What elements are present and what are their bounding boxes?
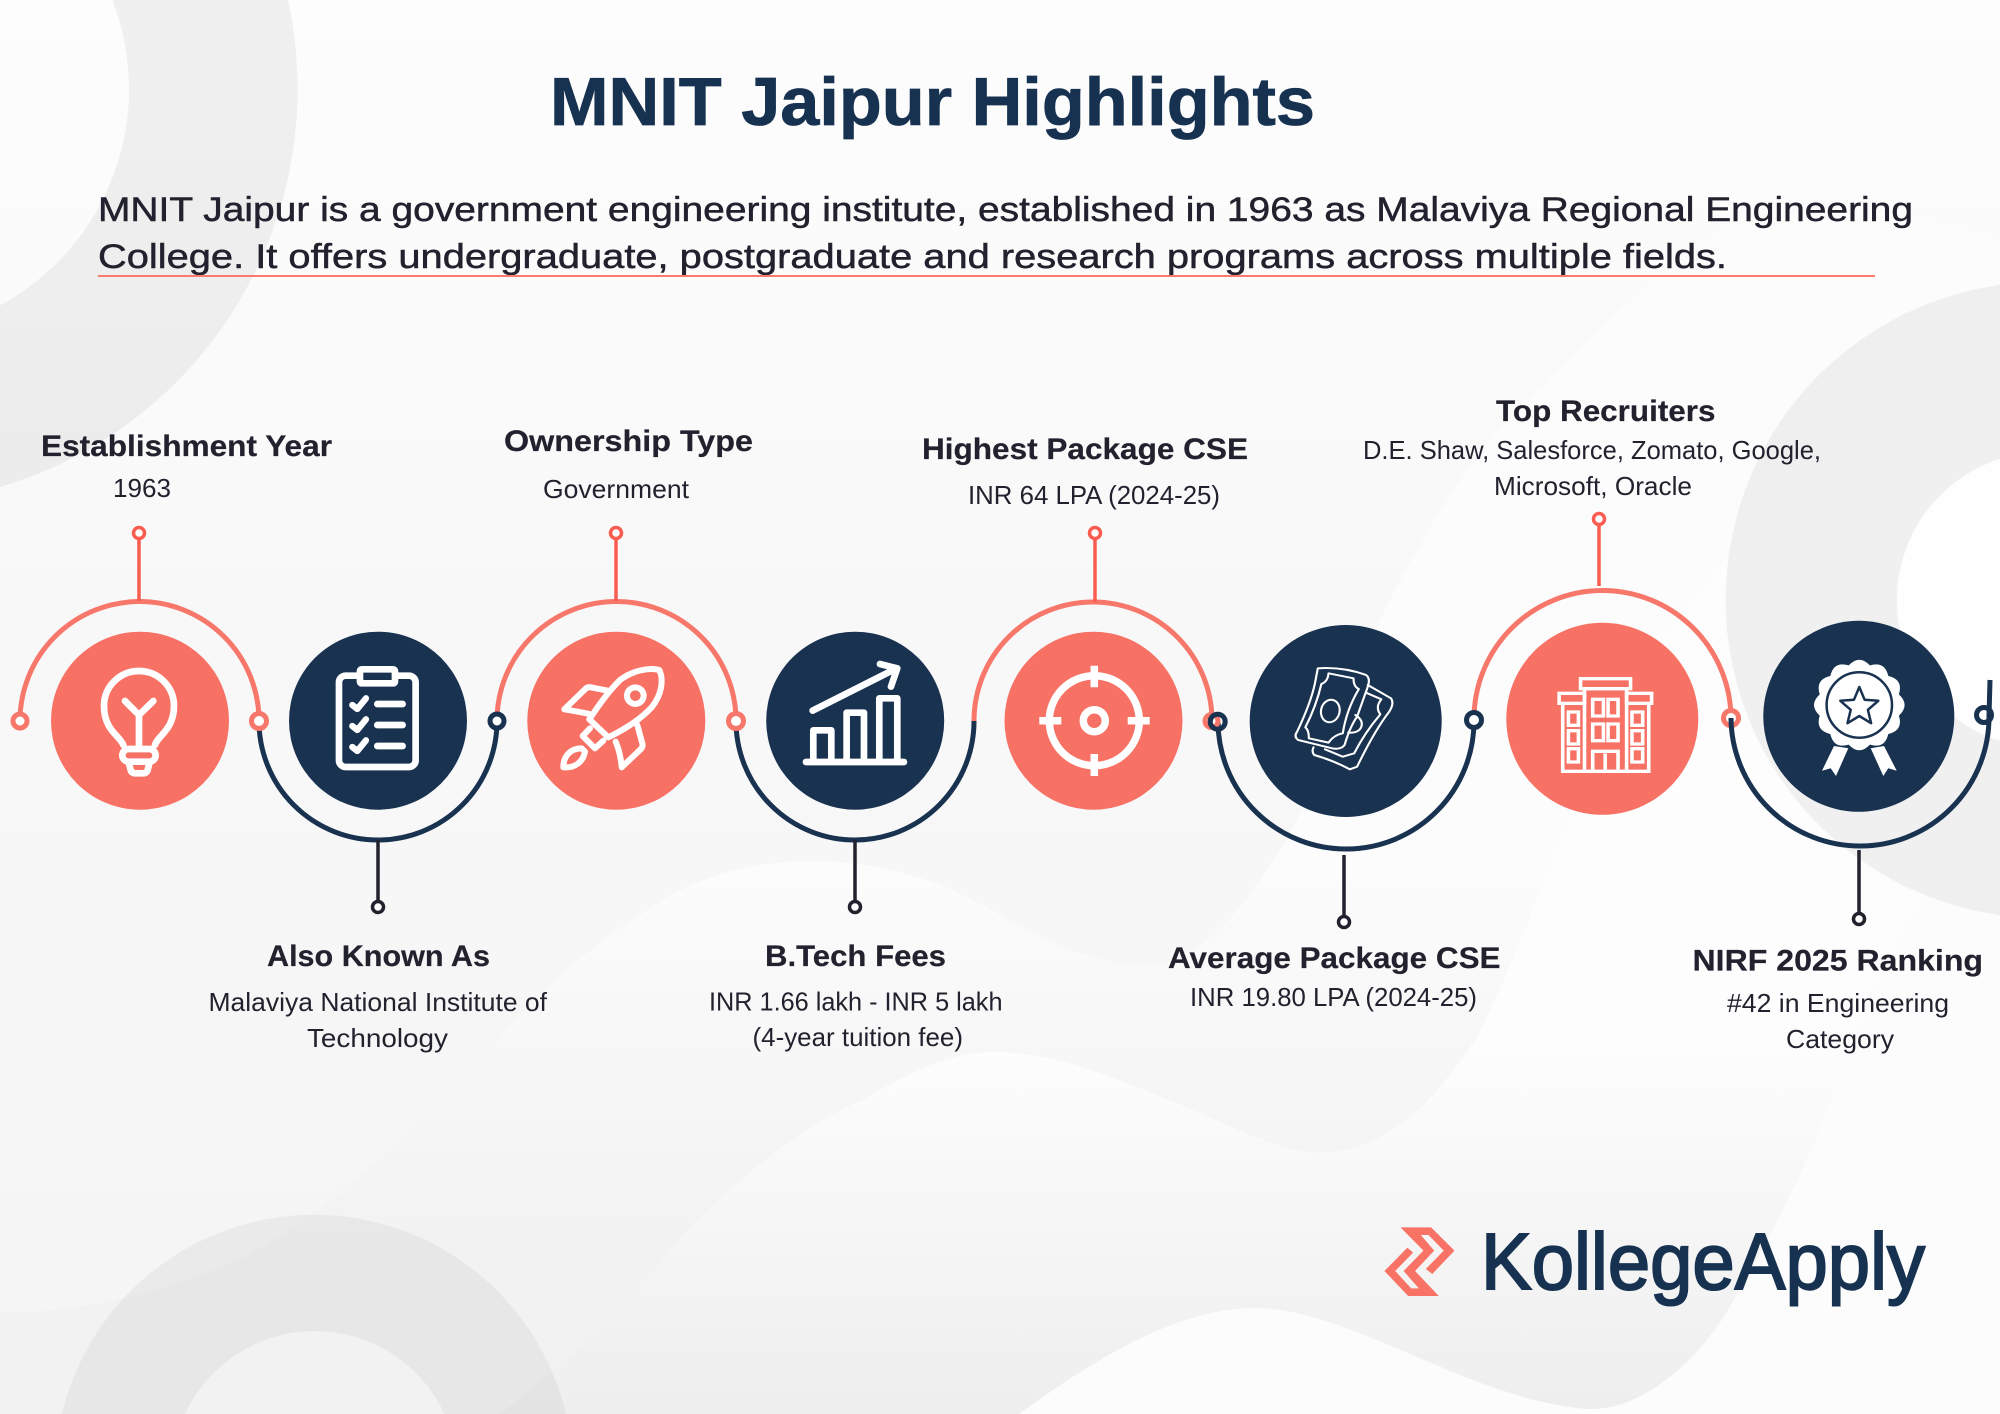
- step 2: also known as: [208, 632, 548, 1053]
- intro paragraph: College. It offers undergraduate, postgraduate and research programs across multiple fields.: [98, 238, 1727, 276]
- icon: award rosette: [1814, 660, 1905, 776]
- heading: Average Package CSE: [1168, 942, 1500, 975]
- heading: Also Known As: [267, 940, 490, 973]
- circle: chart: [766, 632, 944, 810]
- timeline arcs and connectors: [13, 514, 1992, 928]
- circle: target: [1004, 632, 1182, 810]
- value: [208, 987, 548, 1053]
- circle: lightbulb: [51, 632, 229, 810]
- icon: rocket: [563, 669, 662, 767]
- step 8: nirf ranking: [1692, 621, 1983, 1054]
- icon: bar chart: [806, 664, 904, 762]
- logo: KollegeApply: [1384, 1217, 1925, 1306]
- step 4: btech fees: [709, 632, 1002, 1052]
- intro underline: [98, 275, 1875, 277]
- value: Government: [543, 474, 690, 504]
- icon: logo chevrons: [1384, 1227, 1454, 1296]
- step 1: establishment year: [41, 430, 332, 810]
- icon: clipboard: [339, 669, 416, 767]
- value: INR 19.80 LPA (2024-25): [1190, 982, 1477, 1012]
- circle: rocket: [527, 632, 705, 810]
- title: MNIT Jaipur Highlights: [550, 64, 1315, 140]
- icon: lightbulb: [104, 671, 174, 773]
- step 5: highest package: [922, 433, 1248, 810]
- heading: Top Recruiters: [1496, 395, 1716, 428]
- value: [1363, 435, 1821, 501]
- icon: building: [1559, 679, 1652, 771]
- value: [709, 986, 1002, 1052]
- wordmark: KollegeApply: [1481, 1217, 1925, 1306]
- heading: Establishment Year: [41, 430, 332, 463]
- value: (4-year tuition fee): [752, 1022, 963, 1052]
- circle: clipboard: [289, 632, 467, 810]
- heading: NIRF 2025 Ranking: [1692, 944, 1983, 978]
- value: [1727, 988, 1949, 1054]
- icon: banknotes: [1296, 668, 1392, 769]
- value: Microsoft, Oracle: [1494, 471, 1692, 501]
- value: Malaviya National Institute of: [208, 987, 548, 1017]
- intro paragraph: [98, 191, 1913, 276]
- heading: Highest Package CSE: [922, 433, 1248, 466]
- circle: banknotes: [1250, 625, 1442, 817]
- value: #42 in Engineering: [1727, 988, 1949, 1018]
- intro paragraph: MNIT Jaipur is a government engineering institute, established in 1963 as Malaviya Regional Engineering: [98, 191, 1913, 229]
- value: INR 1.66 lakh - INR 5 lakh: [709, 986, 1002, 1016]
- value: 1963: [113, 473, 171, 503]
- value: Category: [1786, 1024, 1894, 1054]
- value: INR 64 LPA (2024-25): [968, 480, 1220, 510]
- step 6: average package: [1168, 625, 1500, 1012]
- icon: target: [1039, 666, 1150, 776]
- value: Technology: [307, 1023, 448, 1053]
- heading: Ownership Type: [504, 425, 753, 458]
- circle: building: [1506, 623, 1698, 815]
- value: D.E. Shaw, Salesforce, Zomato, Google,: [1363, 435, 1821, 465]
- step 7: top recruiters: [1363, 395, 1821, 815]
- heading: B.Tech Fees: [765, 940, 946, 973]
- circle: award: [1763, 621, 1954, 812]
- step 3: ownership type: [504, 425, 753, 810]
